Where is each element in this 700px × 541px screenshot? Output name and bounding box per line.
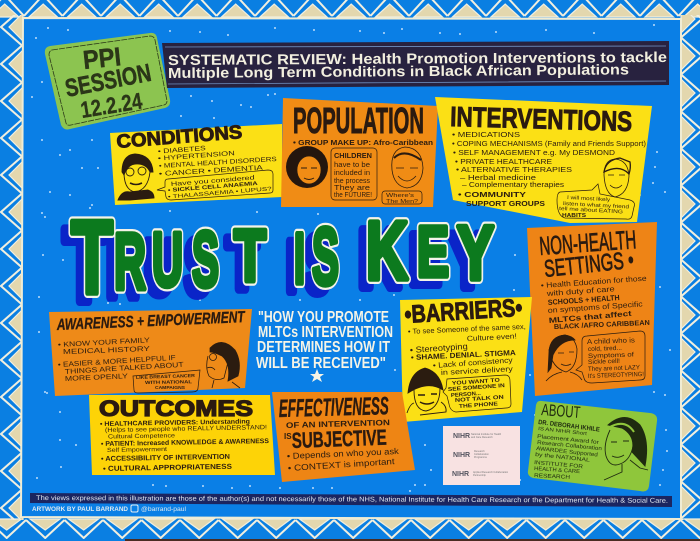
outcomes list: • CULTURAL APPROPRIATENESS [103, 462, 232, 473]
letter outlines: Y [457, 211, 494, 296]
interventions list: • SELF MANAGEMENT e.g. My DESMOND [453, 150, 615, 157]
outcomes list: • PATIENT: Increased KNOWLEDGE & AWARENESS [101, 438, 269, 448]
effectiveness heading: EFFECTIVENESS [278, 392, 389, 423]
letters: S [312, 212, 339, 302]
bubble: you want to see someone: THE PHONE [459, 401, 498, 410]
bubble: children: CHILDREN [334, 153, 372, 160]
letter shadows: E [409, 221, 441, 300]
bubble: where's the men: The Men? [386, 199, 418, 205]
footer disclaimer bar: The views expressed in this illustration are those of the author(s) and not necessarily those of the NHS, National Institute for Health Care Research or the Department for Health & Social Care. [36, 495, 668, 505]
bubble: a child who is cold: cold, tired... [588, 345, 622, 353]
letter outlines: I [294, 220, 305, 299]
conditions list: • HYPERTENSION [158, 150, 235, 162]
awareness list: MEDICAL HISTORY [63, 346, 150, 356]
letters [71, 200, 494, 316]
non-health text: on symptoms of Specific [548, 299, 643, 315]
bubble: a child who is cold: Symptoms of [588, 351, 634, 360]
subjective word: SUBJECTIVE [291, 425, 387, 453]
conditions list: • MENTAL HEALTH DISORDERS [159, 156, 278, 170]
awareness heading: AWARENESS + EMPOWERMENT [56, 309, 246, 334]
interventions list: SUPPORT GROUPS [466, 199, 545, 208]
panel: PPI session [45, 33, 170, 129]
letter outlines: E [417, 213, 449, 292]
panel: awareness and empowerment [49, 309, 252, 396]
about text: INSTITUTE FOR [534, 460, 583, 470]
letter shadows: K [358, 212, 400, 305]
bubble: a child who is cold: It's STEREOTYPING! [588, 371, 644, 380]
barriers list [408, 322, 526, 377]
non-health text: BLACK /AFRO CARIBBEAN [554, 320, 650, 331]
awareness list: • EASIER & MORE HELPFUL IF [58, 355, 176, 369]
letter shadows: T [63, 208, 105, 324]
NIHR logo card: NIHR [452, 471, 469, 478]
bubble: where's the men: Where's [386, 193, 414, 199]
effectiveness list: • CONTEXT is important [287, 456, 396, 473]
letters: S [192, 215, 219, 303]
bubble: like breast cancer: CAMPAIGNS [155, 385, 185, 390]
about text: AWARDEE Supported [536, 446, 598, 458]
letters: T [234, 216, 266, 297]
NIHR logo card: Collaboration [474, 453, 489, 456]
panel: conditions [110, 122, 282, 205]
bubble: you want to see someone [443, 375, 511, 412]
panel: population: • GROUP MAKE UP: Afro-Caribbean [293, 138, 434, 147]
interventions list: – Complementary therapies [462, 182, 565, 189]
letter shadows: T [226, 224, 258, 305]
letter outlines: T [71, 200, 113, 316]
portrait: woman with glasses [207, 342, 240, 388]
non-health text: with duty of care [545, 284, 615, 298]
bubble: eating habits: HABITS [562, 213, 587, 219]
about text [534, 419, 602, 481]
quote: MLTCs INTERVENTION [258, 324, 393, 341]
bubble: you want to see someone: NOT TALK ON [455, 395, 504, 404]
quote: "HOW YOU PROMOTE [258, 309, 389, 326]
effectiveness list: • Depends on who you ask [287, 446, 400, 461]
barriers heading: •BARRIERS• [404, 294, 523, 329]
bubble: children: included in [334, 170, 370, 177]
outcomes list [100, 418, 269, 473]
letter outlines: U [152, 218, 183, 303]
letter outlines: S [192, 215, 219, 303]
interventions list [452, 132, 646, 208]
letter outlines: R [114, 217, 146, 306]
bubble: children [331, 148, 377, 200]
population heading: POPULATION [293, 100, 424, 141]
conditions list [158, 145, 278, 178]
bubble: a child who is cold: They are not LAZY [588, 364, 641, 373]
NIHR logo card: Research [474, 450, 485, 453]
bubble: children: have to be [334, 162, 370, 169]
starry dots [32, 25, 670, 491]
portrait: smiling man [392, 147, 423, 188]
letter outlines: T [234, 216, 266, 297]
panel: effectiveness: OF AN INTERVENTION [286, 418, 390, 430]
non-health text [541, 274, 650, 331]
panel: PPI session: SESSION [63, 59, 154, 103]
portrait: Dr Deborah Ikhile [604, 418, 648, 480]
title banner [162, 41, 669, 88]
bubble: eating habits [557, 184, 634, 219]
letters: Y [457, 211, 494, 296]
effectiveness list [287, 446, 400, 473]
about text: by the NATIONAL [535, 452, 590, 464]
letter outlines [71, 200, 494, 316]
bubble: children: They are [334, 185, 370, 192]
outcomes list: (Helps to see people who REALLY UNDERSTAND! [105, 424, 267, 434]
awareness list: THINGS ARE TALKED ABOUT [65, 362, 185, 376]
interventions list: • MEDICATIONS [452, 132, 520, 139]
subjective word [284, 425, 387, 453]
interventions list: • COMMUNITY [458, 190, 526, 199]
bubble: you want to see someone: PERSON... [451, 391, 482, 399]
NIHR logo card: National Institute for Health [471, 433, 502, 436]
about text: RESEARCH [534, 473, 570, 481]
letter shadows: I [286, 228, 297, 307]
title banner: SYSTEMATIC REVIEW: Health Promotion Interventions to tackle [168, 50, 667, 69]
letter shadows: U [144, 226, 175, 311]
bubble: like breast cancer [133, 370, 200, 393]
artwork credit: ARTWORK BY PAUL BARRAND [32, 507, 129, 513]
barriers list: • SHAME. DENIAL. STIGMA [411, 348, 517, 362]
portrait: woman with headwrap [604, 158, 630, 197]
bubble: have you considered: • THALASSAEMIA • LUPUS? [168, 186, 272, 200]
bubble: have you considered [157, 170, 273, 200]
panel: barriers [400, 294, 532, 422]
NIHR logo card: Programme [474, 456, 488, 459]
artwork credit [32, 505, 186, 513]
about text: Placement Award for [537, 434, 599, 446]
footer disclaimer bar [30, 493, 672, 507]
icon: star [310, 369, 324, 382]
outcomes list: Cultural Competence [108, 433, 176, 440]
interventions list: • COPING MECHANISMS (Family and Friends Support) [452, 141, 646, 148]
bubble: children: the FUTURE! [334, 192, 372, 199]
letters: K [366, 204, 408, 297]
portrait: woman with braid [546, 335, 582, 381]
bubble: a child who is cold: A child who is [587, 337, 636, 346]
conditions list: • DIABETES [158, 145, 207, 155]
subjective word: IS [284, 432, 292, 441]
bubble: eating habits: listen to what my friend [563, 201, 629, 210]
bubble: you want to see someone: YOU WANT TO [452, 378, 501, 387]
awareness list: • KNOW YOUR FAMILY [58, 337, 150, 349]
panel: effectiveness [272, 392, 415, 482]
interventions heading: INTERVENTIONS [450, 101, 633, 137]
artwork credit: @barrand-paul [141, 507, 186, 513]
letter shadows: S [184, 223, 211, 311]
panel: PPI session: 12.2.24 [79, 88, 144, 123]
portrait: woman with curly hair [286, 146, 328, 188]
awareness list: MORE OPENLY [65, 373, 128, 383]
letter shadows: R [106, 225, 138, 314]
non-health text: MLTCs that affect [548, 309, 633, 325]
icon: instagram [131, 505, 138, 512]
quote: DETERMINES HOW IT [257, 339, 390, 356]
NIHR logo card: Partnership [473, 474, 486, 477]
conditions list: • CANCER • DEMENTIA [159, 165, 264, 178]
letters: I [294, 220, 305, 299]
bubble: children: the process [334, 178, 370, 185]
bubble: a child who is cold [576, 331, 645, 383]
quote: WILL BE RECEIVED" [256, 355, 386, 372]
bubble: have you considered: Have you considered [171, 174, 256, 188]
interventions list: – Herbal medicine [460, 175, 536, 182]
title banner: Multiple Long Term Conditions in Black African Populations [168, 62, 629, 82]
about text: DR. DEBORAH IKHILE [538, 419, 601, 434]
portrait: man with hat [407, 368, 446, 415]
barriers list: • Lack of consistency [433, 355, 513, 370]
bubble: like breast cancer: LIKE BREAST CANCER [136, 373, 196, 380]
letters: E [417, 213, 449, 292]
main headline: trust is key [63, 200, 494, 324]
bubble: eating habits: tell me about EATING [559, 206, 623, 215]
non-health text: • Health Education for those [541, 274, 647, 290]
about heading: ABOUT [541, 401, 581, 422]
outcomes list: • ACCESSIBILITY OF INTERVENTION [101, 454, 230, 463]
NIHR logo card: Applied Research Collaboration [473, 471, 509, 474]
NIHR logo card [443, 426, 520, 485]
conditions heading: CONDITIONS [116, 122, 243, 153]
NIHR logo card: NIHR [453, 433, 470, 440]
letter shadows: S [304, 220, 331, 310]
interventions list: • PRIVATE HEALTHCARE [455, 159, 552, 166]
letter shadows [63, 208, 486, 324]
panel: population [281, 98, 438, 207]
bubble: a child who is cold: Sickle cell! [588, 358, 620, 366]
awareness list [58, 337, 185, 383]
panel: interventions [435, 97, 652, 223]
letters: U [152, 218, 183, 303]
outcomes list: • HEALTHCARE PROVIDERS: Understanding [100, 418, 250, 428]
non-health text: SCHOOLS + HEALTH [548, 293, 620, 307]
NIHR logo card: NIHR [453, 452, 470, 459]
quote [256, 309, 393, 382]
letter outlines: K [366, 204, 408, 297]
letter shadows: Y [449, 219, 486, 304]
letters: T [71, 200, 113, 316]
panel: about [528, 401, 657, 491]
barriers list: Culture even! [467, 331, 517, 343]
barriers list: in service delivery [441, 364, 513, 377]
bubble: have you considered: • SICKLE CELL ANAEMIA [168, 181, 258, 194]
bubble: you want to see someone: SEE SOMEONE IN [448, 383, 505, 393]
barriers list: • To see Someone of the same sex, [408, 322, 526, 336]
outcomes list: Self Empowerment [107, 447, 167, 454]
outcomes heading: OUTCOMES [99, 396, 253, 421]
bubble: like breast cancer: WITH NATIONAL [145, 379, 192, 385]
bubble: where's the men [382, 191, 422, 205]
letter outlines: S [312, 212, 339, 302]
NIHR logo card: and Care Research [471, 436, 493, 439]
about text: IS AN NIHR Short [538, 426, 588, 437]
about text: Research Collaboration [537, 440, 602, 452]
panel: non-health settings: SETTINGS • [543, 247, 635, 283]
letters: R [114, 217, 146, 306]
panel: non-health settings [527, 222, 657, 396]
interventions list: • ALTERNATIVE THERAPIES [456, 167, 572, 174]
barriers list: • Stereotyping [409, 341, 468, 355]
bubble: eating habits: I will most likely [567, 195, 611, 203]
portrait: man with glasses [118, 154, 154, 200]
panel: outcomes [89, 395, 275, 475]
about text: HEALTH & CARE [534, 466, 581, 475]
panel: PPI session: PPI [81, 41, 122, 75]
